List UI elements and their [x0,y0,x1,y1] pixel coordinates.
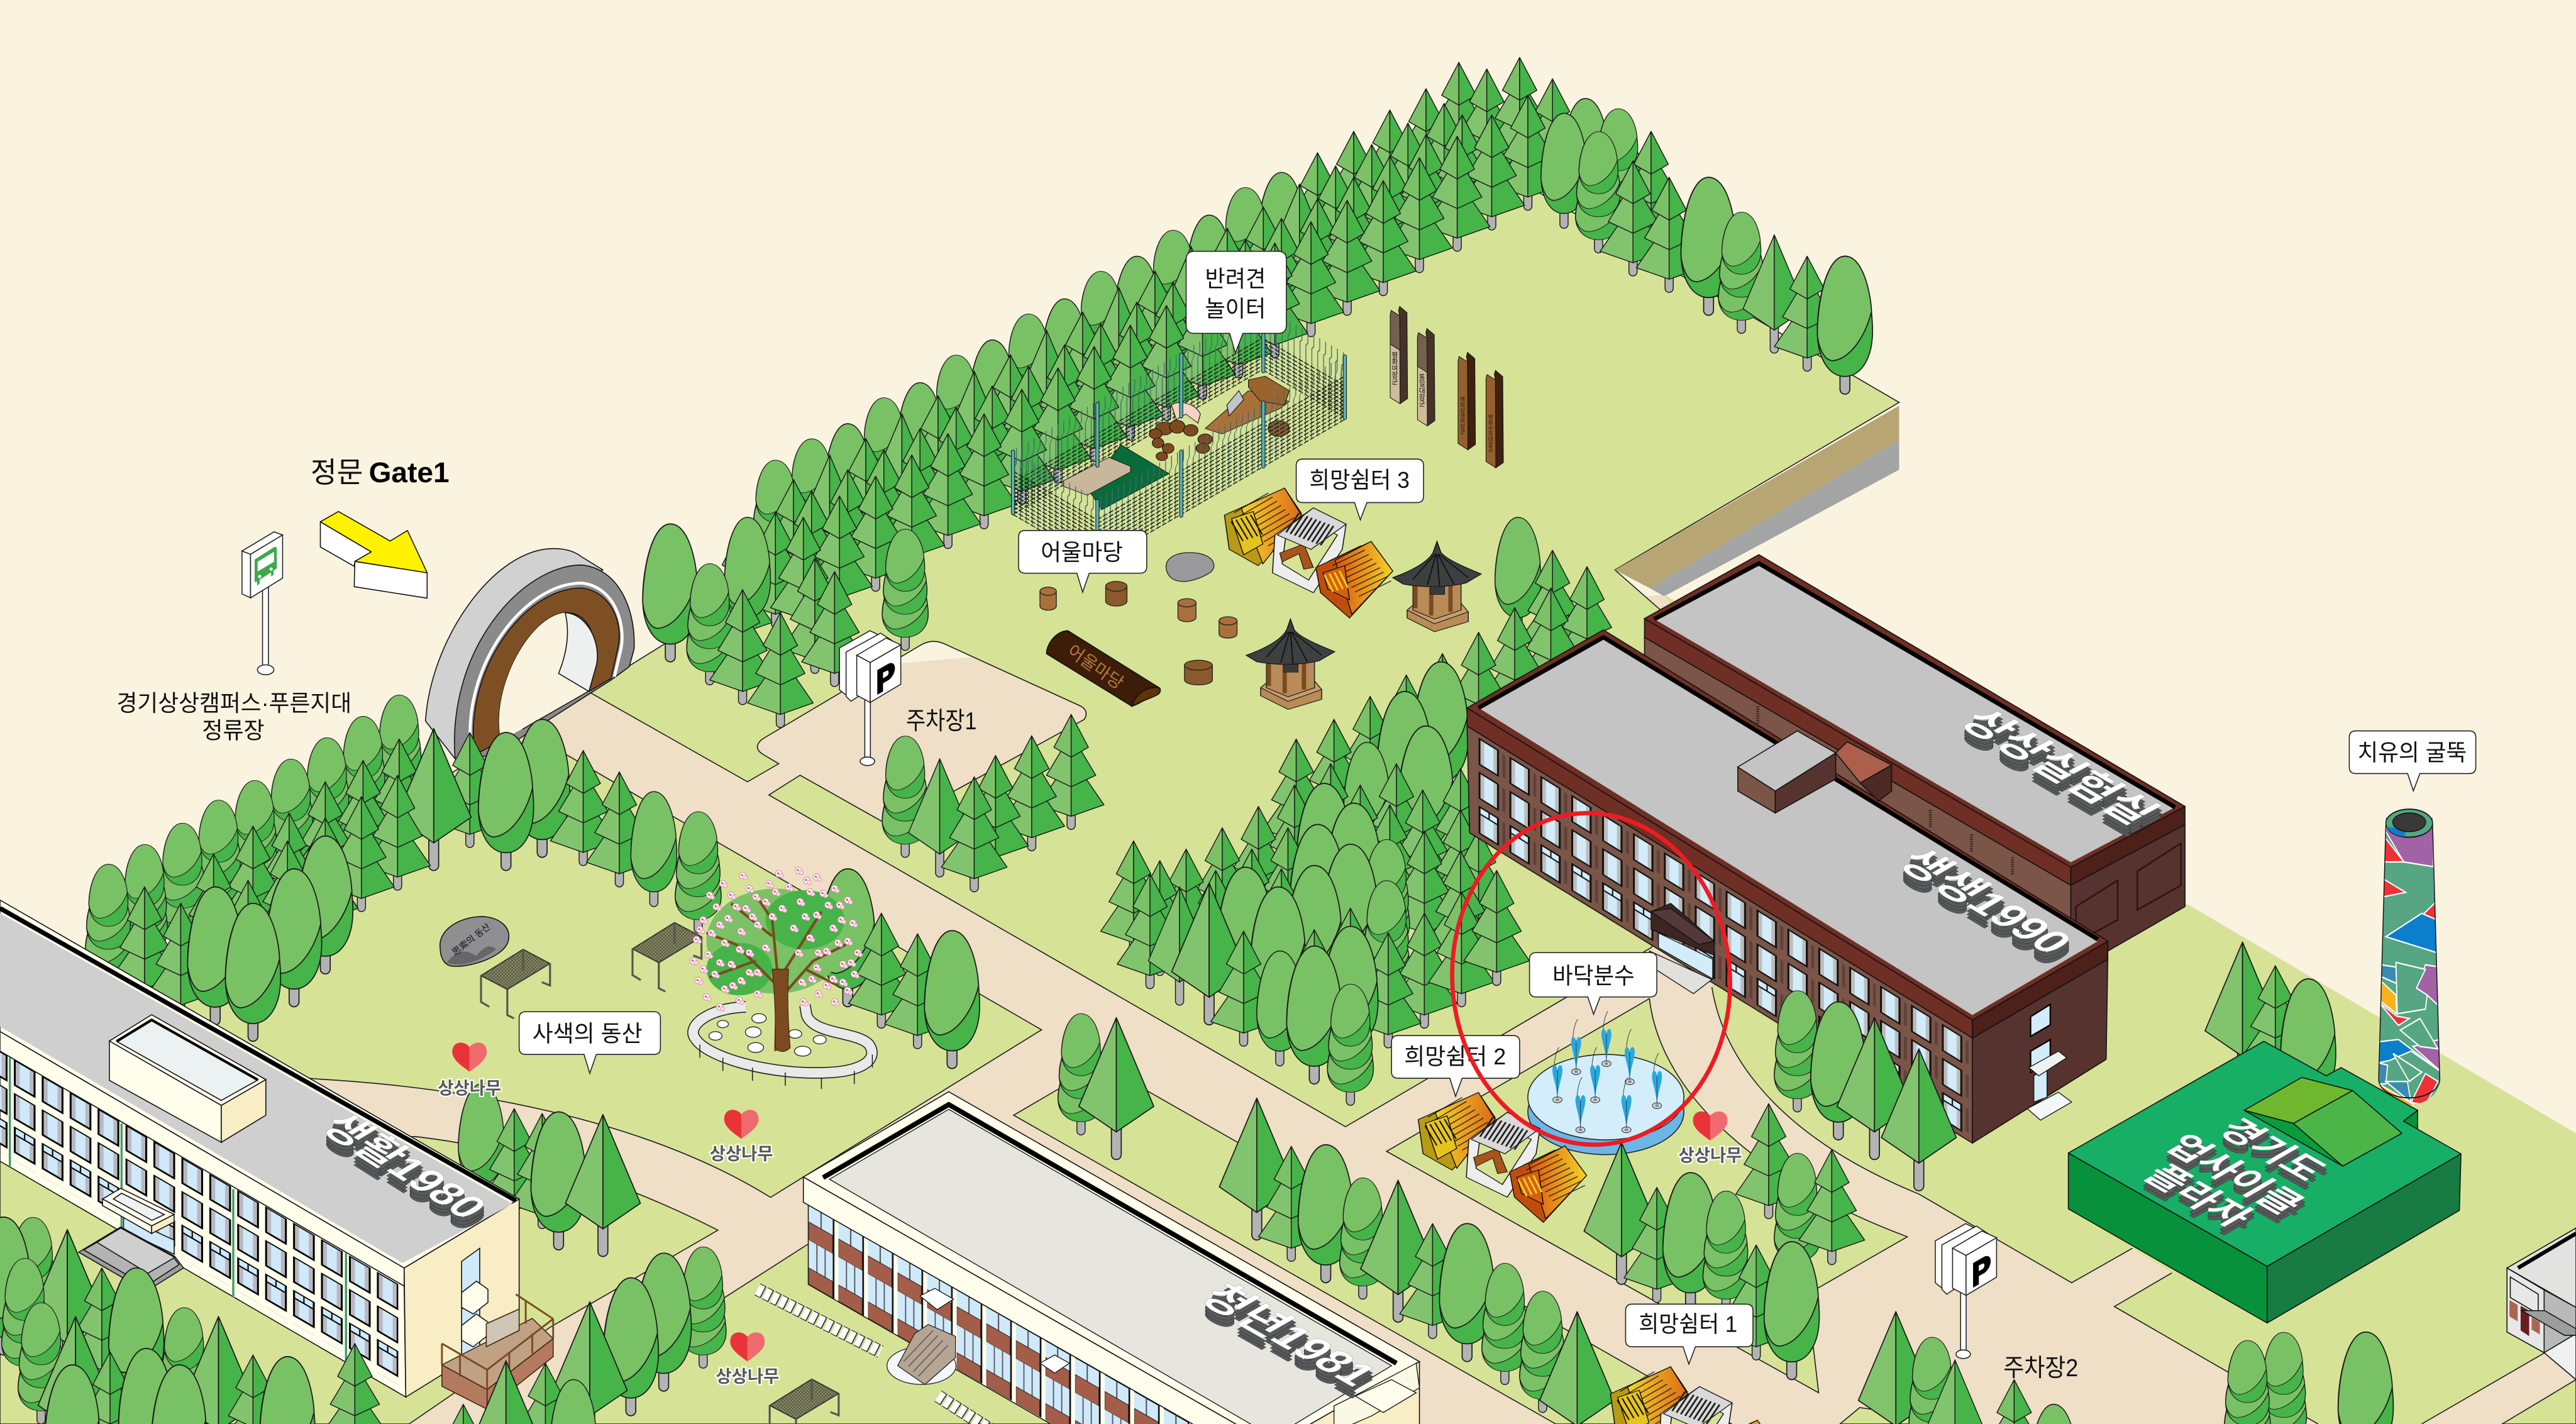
plaza building [2069,1041,2461,1323]
lawn: south grass [1840,1408,1971,1424]
parking lot 1 trees [882,714,1104,892]
building label: youth 1981: 청년1981 [1189,1278,1388,1392]
pavilion: upper [1393,541,1481,632]
wooden terrace [442,1294,553,1409]
magnolia tree with ring bench [690,867,872,1089]
callout: dog playground: 반려견 [1205,266,1266,292]
ground slope strip [1615,406,1899,596]
log sign: gathering yard [1046,631,1160,706]
text: bus stop name: 정류장 [202,717,265,743]
roof box [109,1015,266,1142]
callout: shelter 1: 희망쉼터 1 [1639,1311,1737,1337]
road edges at gate [522,692,588,729]
lawn: bottom right corner [2502,1379,2576,1424]
title: main gate: Gate1 [369,456,450,488]
lawn: south west [0,1137,718,1424]
totem: peace: 평화여장군 [1390,351,1400,385]
building label: coexistence 1990: 생생1990 [1887,851,2084,968]
building: youth 1981 [804,1091,1420,1424]
title: main gate: 정문 [311,456,363,488]
stools [709,1013,826,1056]
heart marker 2 [710,1110,773,1163]
heart marker 3: 상상나무 [716,1367,779,1386]
totem: guardian: 평화수호대장군 [1487,414,1495,453]
east wall windows [2031,1005,2050,1073]
text: bus stop name [117,690,351,743]
trees: west garden strip [1058,1013,1154,1159]
lawn edges: east field [1712,987,2545,1424]
plaza label: 경기도 [2208,1118,2335,1191]
plaza label: 업사이클 [2155,1129,2313,1220]
shelter group 2 [1418,1093,1586,1222]
gate arrow [321,512,427,598]
callout: healing chimney [2349,731,2476,791]
callout: shelter 3: 희망쉼터 3 [1309,467,1410,493]
trees: right of magnolia [820,869,980,1069]
trees: beside youth building [512,1247,726,1424]
building: coexistence 1990 [1467,630,2108,1145]
totem: unity [1417,328,1435,426]
building label: life 1980: 생활1980 [310,1108,497,1225]
heart marker 4 [1679,1112,1742,1165]
trees: behind student building [458,1084,641,1257]
stumps and rock in the gathering yard [1040,553,1237,685]
title: main gate [311,456,450,488]
building label: coexistence 1990: 생생1990 [1887,854,2084,972]
plaza label: 경기도 [2208,1113,2335,1186]
building label: life 1980: 생활1980 [310,1113,497,1230]
forest: west [86,695,721,1041]
lawn: north field [588,148,1899,1127]
trees: south band [1219,1098,1615,1424]
building label: imagination lab: 상상실험실 [1949,709,2169,835]
callout: floor fountain [1530,952,1657,1014]
forest: south west corner [0,1217,543,1424]
building: south east corner [2507,1228,2576,1379]
trees: east of fountain [1774,991,1956,1191]
fence posts [1011,333,1347,532]
callout: healing chimney: 치유의 굴뚝 [2357,740,2467,766]
callout: gathering yard: 어울마당 [1041,539,1123,565]
branches [707,895,846,1051]
plaza label: 경기도 [2208,1122,2335,1195]
building label: imagination lab: 상상실험실 [1949,712,2169,838]
plaza label: 업사이클 [2155,1134,2313,1225]
callout: shelter 2 [1391,1035,1520,1096]
shelter group 3 [1224,488,1393,618]
plaza label: 플라자 [2135,1159,2262,1232]
dog playground fence and yard [1011,305,1347,564]
crosswalk stripes [758,1289,1002,1424]
ring bench [693,1005,872,1089]
building label: life 1980: 생활1980 [310,1116,497,1234]
front pines by fountain [1429,871,1530,1007]
bench: by magnolia [633,922,702,991]
canopy leaves [707,888,844,995]
trees: behind plaza [2205,942,2336,1117]
callout: shelter 1 [1625,1304,1753,1364]
callout: shelter 3 [1296,459,1423,520]
main entrance [1649,903,1715,994]
trees: south east [2225,1332,2393,1424]
pavilion: lower [1246,619,1335,709]
plaza label: 플라자 [2135,1167,2262,1240]
heart marker 1: 상상나무 [438,1078,501,1098]
heart marker 3 [716,1332,779,1386]
front fence [1013,355,1345,564]
text: bus stop name: 경기상상캠퍼스·푸른지대 [117,690,351,716]
memorial rock: 思索의 동산 [450,922,492,958]
memorial rock [440,917,509,966]
trees: south centre [1859,1311,2077,1424]
callout: dog playground [1186,251,1286,353]
plaza label: 업사이클 [2155,1138,2313,1228]
building label: youth 1981: 청년1981 [1189,1283,1388,1397]
text: parking lot 1: 주차장1 [906,708,976,735]
blossoms [690,867,863,1011]
plaza label [2135,1113,2335,1240]
text: parking lot 2: 주차장2 [2003,1355,2078,1382]
forest: centre block [1101,517,1620,1105]
east entrance [2027,1051,2072,1120]
parking sign 2 [1935,1223,1996,1359]
bus stop sign [242,532,282,675]
heart marker 1 [438,1042,501,1098]
totem: unity: 통일대장군 [1417,373,1427,407]
totem: harmony [1458,352,1476,450]
callout: dog playground: 놀이터 [1205,296,1266,322]
gate ring [426,549,634,759]
callout: floor fountain: 바닥분수 [1552,963,1635,988]
lawn: beside youth building [528,1232,1150,1424]
parking sign 1 [839,631,901,766]
building label: coexistence 1990: 생생1990 [1887,847,2084,965]
forest: north ridge [643,57,1872,727]
red highlight ellipse [1441,803,1741,1154]
lawn: tree band [1014,1064,1732,1424]
building label: coexistence 1990: 생생1990 [1887,842,2084,960]
totem: peace [1390,306,1408,404]
entrance canopy [920,1288,954,1310]
callout: meditation hill: 사색의 동산 [533,1020,643,1046]
shelter group 1 [1610,1367,1779,1424]
building: life 1980 [0,900,553,1409]
1980 entrance [79,1188,184,1291]
healing chimney [2378,809,2441,1105]
heart marker 2: 상상나무 [710,1144,773,1163]
fountain [1528,1011,1684,1155]
outdoor stairs [887,1325,956,1384]
lawn: meditation hill [0,729,1042,1197]
tree marker hearts [438,1042,1742,1386]
heart marker 4: 상상나무 [1679,1145,1742,1165]
lawn: fountain garden [1386,998,1908,1393]
building: imagination lab [1644,555,2185,1002]
trees: fountain garden south [1584,1104,1865,1379]
totem poles [1390,306,1503,468]
building label: youth 1981: 청년1981 [1189,1286,1388,1400]
back fence [1013,305,1345,515]
building label: youth 1981: 청년1981 [1189,1289,1388,1404]
callout: shelter 2: 희망쉼터 2 [1404,1044,1506,1069]
east annex [1334,1363,1420,1424]
lawn: east field behind plaza [1664,595,2576,1424]
building label: imagination lab: 상상실험실 [1949,704,2169,830]
east windows and balconies [462,1248,488,1357]
totem: guardian [1486,370,1503,468]
road network [0,595,2576,1424]
yard equipment [1063,376,1290,510]
callout: gathering yard [1019,531,1147,592]
callout: meditation hill [519,1012,660,1073]
totem: harmony: 해원상생여장군 [1459,396,1466,434]
building label: imagination lab: 상상실험실 [1949,715,2169,842]
bench: by rock [481,949,550,1018]
log sign: gathering yard: 어울마당 [1064,641,1127,693]
roof block [1738,731,1891,813]
plaza label: 플라자 [2135,1164,2262,1237]
trunk [772,969,790,1052]
bench: lower [770,1379,839,1424]
building label: life 1980: 생활1980 [310,1119,497,1237]
